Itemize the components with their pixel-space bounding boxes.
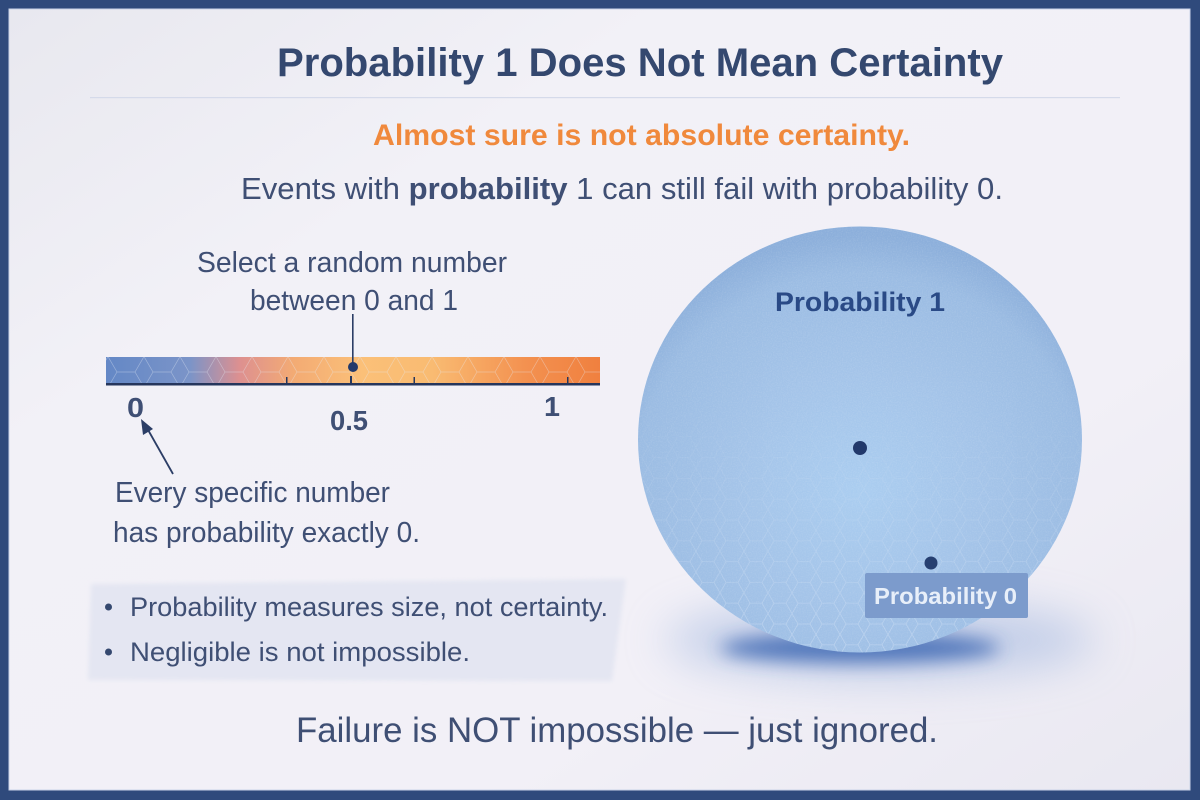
conclusion: Failure is NOT impossible — just ignored. (296, 711, 938, 750)
bullet 2: Negligible is not impossible. (130, 637, 470, 667)
number line prompt: between 0 and 1 (250, 285, 458, 317)
axis label 1: 1 (544, 391, 560, 422)
number line prompt (197, 247, 507, 317)
zero probability note: Every specific number (115, 477, 390, 509)
probability 1 label: Probability 1 (775, 287, 945, 317)
title divider (90, 97, 1120, 98)
arrow to zero (141, 419, 173, 474)
key statement: Events with probability 1 can still fail with probability 0. (241, 171, 1003, 206)
probability 0 label: Probability 0 (874, 583, 1017, 609)
gradient bar from 0 to 1 (106, 357, 600, 386)
subtitle: Almost sure is not absolute certainty. (373, 119, 910, 152)
number line section (106, 247, 600, 549)
axis label 0.5: 0.5 (330, 405, 368, 436)
sphere (638, 226, 1082, 653)
probability 0 label (865, 573, 1028, 618)
zero probability note: has probability exactly 0. (113, 517, 420, 549)
title: Probability 1 Does Not Mean Certainty (277, 41, 1004, 85)
bullet 1: Probability measures size, not certainty. (130, 592, 608, 622)
point of probability 0 (924, 556, 938, 570)
panel: key points (88, 579, 626, 681)
sphere shadow (665, 602, 1095, 678)
random point marker (348, 314, 358, 372)
sphere diagram (638, 226, 1095, 678)
number line prompt: Select a random number (197, 247, 507, 279)
zero probability note (113, 477, 420, 549)
centre point (853, 441, 867, 455)
axis label 0: 0 (127, 392, 144, 423)
